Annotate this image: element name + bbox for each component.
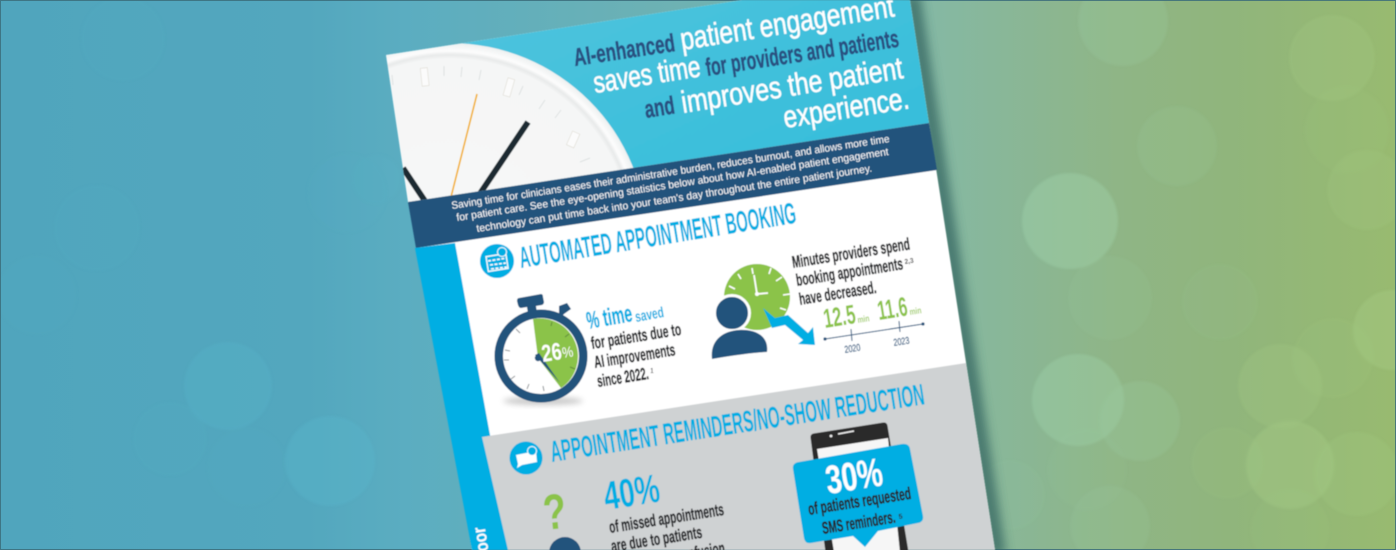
callout: 30 percent: of patients requested <box>807 484 912 519</box>
chart: timeline: 2023 <box>893 336 911 349</box>
icon: stopwatch <box>494 294 588 405</box>
intro text: for patient care. See the eye-opening statistics below about how AI-enabled patient engagement <box>456 146 889 224</box>
panel: appointment reminders <box>510 378 927 550</box>
title: AI-enhanced <box>572 29 677 72</box>
callout: 30 percent: 30% <box>823 451 886 503</box>
text: percent time saved: for patients due to <box>590 320 683 353</box>
panel: header <box>386 0 930 203</box>
text: percent time saved: 1 <box>650 368 654 375</box>
text: 40 percent: 40% <box>601 467 663 519</box>
text: 40 percent: of missed appointments <box>608 500 725 537</box>
chart: timeline: 11.6 <box>875 292 910 326</box>
text: percent time saved: saved <box>634 304 665 326</box>
callout: 30 percent: 5 <box>898 513 903 521</box>
chart: timeline: min <box>909 305 922 317</box>
text: minutes providers: have decreased. <box>798 278 878 309</box>
title: saves time <box>591 50 703 100</box>
chart: timeline: 12.5 <box>821 299 858 334</box>
title: and <box>643 92 677 124</box>
title: experience. <box>781 80 912 135</box>
side strip <box>415 243 511 550</box>
text: minutes providers: 2,3 <box>904 258 914 266</box>
icon: wall clock <box>386 42 634 203</box>
stopwatch value: 26 <box>540 338 564 368</box>
text: percent time saved <box>584 300 683 391</box>
intro text: technology can put time back into your team's day throughout the entire patient journey. <box>476 163 873 235</box>
intro text: Saving time for clinicians eases their administrative burden, reduces burnout, and allows more time <box>451 133 891 212</box>
icon: stopwatch: % <box>561 343 574 362</box>
text: percent time saved: % time <box>584 300 634 335</box>
icon: confused person: ? <box>540 483 569 541</box>
text: 40 percent <box>601 467 726 550</box>
text: percent time saved: since 2022. <box>596 364 650 391</box>
arrow: down <box>763 308 815 345</box>
page white base <box>386 0 995 550</box>
icon: message <box>510 442 542 474</box>
panel: automated appointment booking <box>480 197 925 405</box>
callout: 30 percent: SMS reminders. <box>821 508 897 538</box>
icon: calendar <box>480 244 514 278</box>
chart: timeline: 2020 <box>844 343 862 356</box>
chart: timeline <box>821 292 925 356</box>
text: percent time saved: AI improvements <box>593 340 677 372</box>
infographic page <box>385 0 996 550</box>
callout: 30 percent <box>793 444 923 547</box>
icon: clock and person <box>712 264 815 359</box>
page shadow <box>912 0 998 550</box>
title: for providers and patients <box>704 25 901 82</box>
title: improves the patient <box>679 50 906 120</box>
text: minutes providers <box>791 235 914 309</box>
icon: phone <box>814 426 905 550</box>
intro band <box>408 123 937 248</box>
panel: automated appointment booking: AUTOMATED APPOINTMENT BOOKING <box>517 197 798 275</box>
title <box>572 0 912 135</box>
clock hands <box>477 122 528 198</box>
text: minutes providers: Minutes providers spend <box>791 235 911 272</box>
chart: timeline: min <box>857 313 870 325</box>
panel: appointment reminders background <box>482 363 995 550</box>
heading: APPOINTMENT REMINDERS/NO-SHOW REDUCTION <box>548 378 927 469</box>
text: minutes providers: booking appointments <box>795 254 904 290</box>
